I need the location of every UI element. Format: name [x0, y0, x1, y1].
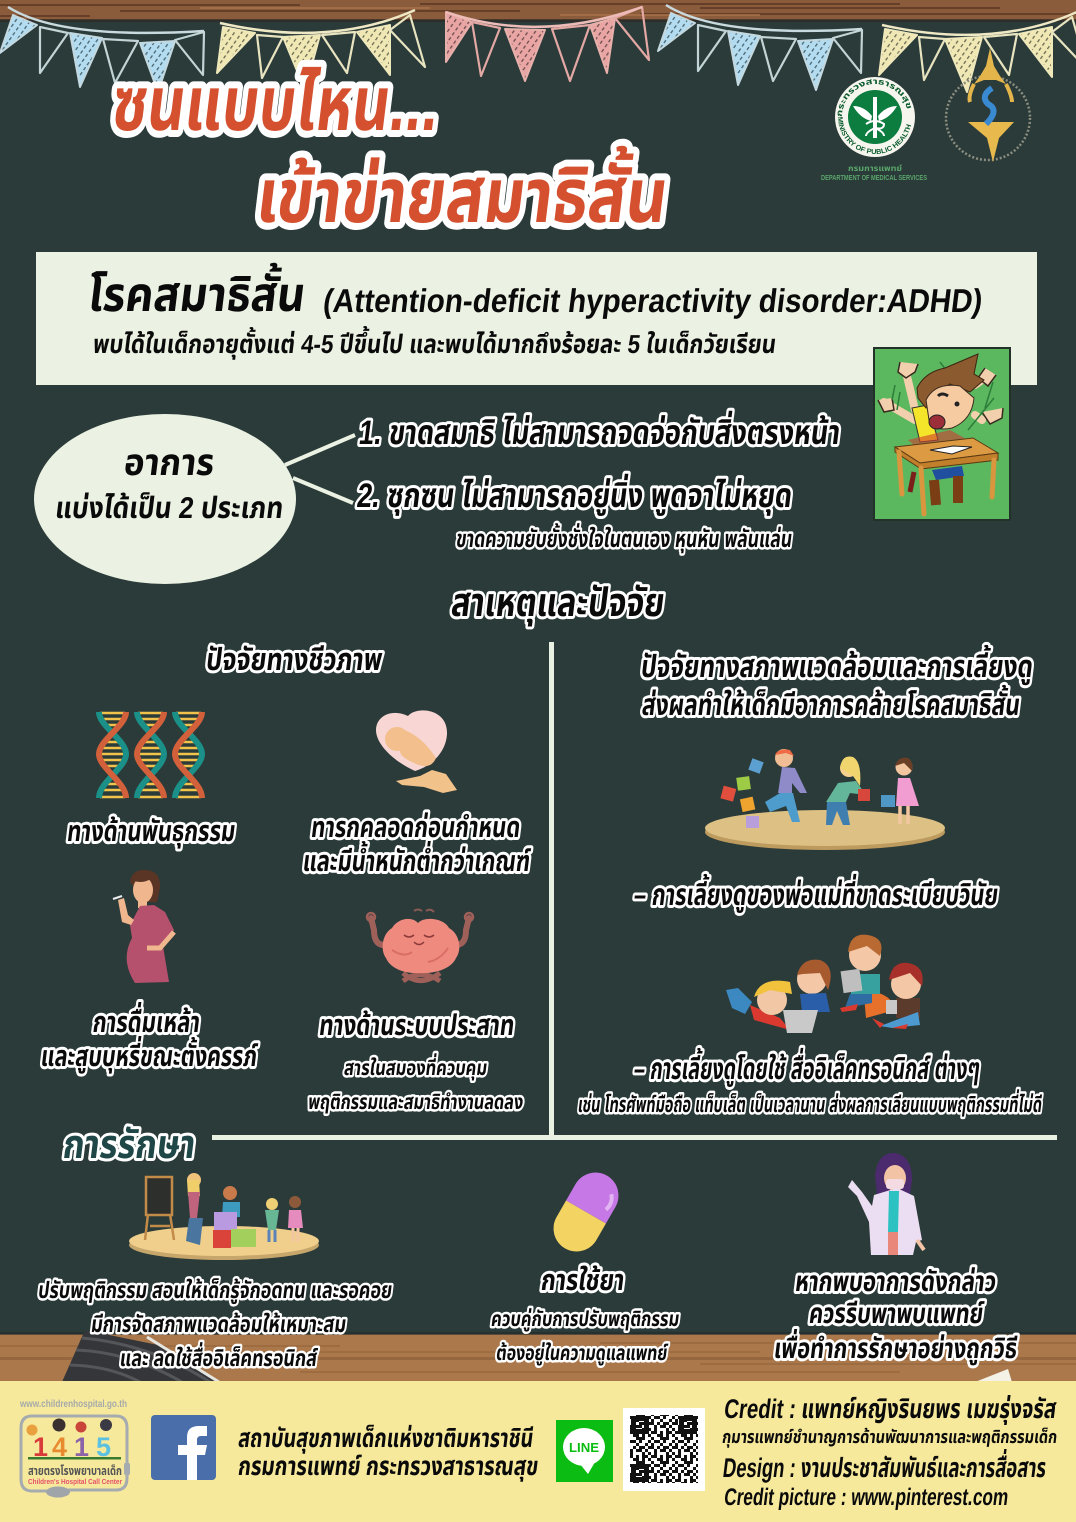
icon: line: LINE: [569, 1440, 599, 1455]
bunting flags: [0, 5, 1076, 92]
label: electronic media parenting: [577, 1047, 1044, 1117]
footer: 1415 call center logo: 1: [33, 1432, 48, 1462]
icon: pregnant woman smoking: [113, 870, 174, 983]
logo: ministry of public health: MINISTRY OF PUBLIC HEALTH: [838, 117, 912, 154]
label: nervous system: ทางด้านระบบประสาท: [317, 1010, 516, 1042]
label: behaviour therapy: และ ลดใช้สื่ออิเล็คทรอนิกส์: [119, 1342, 319, 1371]
footer: institute name: [236, 1423, 540, 1482]
logo: department emblem: [946, 48, 1030, 162]
label: premature birth: ทารกคลอดก่อนกำหนด: [309, 812, 522, 844]
icon: dna: [99, 712, 202, 798]
title: ซนแบบไหน...: [108, 62, 444, 147]
label: nervous system: [307, 1010, 525, 1114]
title: [108, 62, 674, 239]
icon: capsule: [545, 1164, 627, 1260]
symptom list: 2. ซุกซน ไม่สามารถอยู่นิ่ง พูดจาไม่หยุด: [355, 473, 795, 516]
label: see a doctor: [772, 1266, 1020, 1366]
icon: line: [556, 1420, 613, 1482]
footer: 1415 call center logo: 1: [74, 1432, 89, 1462]
icon: fetus in heart and hand: [376, 710, 457, 793]
footer: 1415 call center logo: สายตรงโรงพยาบาลเด็ก: [28, 1464, 122, 1478]
definition heading: โรคสมาธิสั้น: [85, 263, 309, 322]
icon: meditating brain: [367, 910, 473, 981]
footer: 1415 call center logo: 5: [96, 1432, 111, 1462]
divider horizontal: [212, 1135, 1057, 1140]
logo: ministry of public health: กรมการแพทย์: [848, 164, 902, 173]
label: nervous system: พฤติกรรมและสมาธิทำงานลดลง: [307, 1091, 525, 1114]
label: alcohol and smoking: การดื่มเหล้า: [91, 1001, 203, 1039]
divider vertical: [549, 642, 554, 1135]
label: behaviour therapy: มีการจัดสภาพแวดล้อมให้เหมาะสม: [90, 1311, 348, 1337]
symptom list: 1. ขาดสมาธิ ไม่สามารถจดจ่อกับสิ่งตรงหน้า: [357, 410, 843, 452]
connector lines: [285, 435, 355, 503]
footer: 1415 call center logo: 4: [52, 1432, 67, 1462]
label: genetics: ทางด้านพันธุกรรม: [65, 816, 237, 848]
footer: institute name: กรมการแพทย์ กระทรวงสาธารณสุข: [236, 1451, 540, 1482]
heading: biological factors: ปัจจัยทางชีวภาพ: [204, 642, 385, 677]
label: see a doctor: ควรรีบพาพบแพทย์: [807, 1298, 985, 1329]
oval subtext: แบ่งได้เป็น 2 ประเภท: [53, 492, 285, 525]
illustration: doctor: [848, 1153, 924, 1255]
oval: symptoms: [34, 414, 296, 584]
qr code: [623, 1408, 705, 1491]
label: medication: การใช้ยา: [539, 1265, 626, 1297]
title: เข้าข่ายสมาธิสั้น: [252, 145, 674, 239]
label: alcohol and smoking: [39, 1001, 260, 1074]
label: behaviour therapy: [37, 1277, 394, 1371]
definition description: พบได้ในเด็กอายุตั้งแต่ 4-5 ปีขึ้นไป และพบได้มากถึงร้อยละ 5 ในเด็กวัยเรียน: [91, 325, 779, 360]
footer: website: www.childrenhospital.go.th: [19, 1399, 127, 1410]
label: medication: ต้องอยู่ในความดูแลแพทย์: [495, 1342, 669, 1366]
label: medication: ควบคู่กับการปรับพฤติกรรม: [490, 1308, 681, 1332]
footer: 1415 call center logo: Children's Hospital Call Center: [28, 1479, 122, 1486]
symptom list: ขาดความยับยั้งชั่งใจในตนเอง หุนหัน พลันแล่น: [454, 523, 794, 554]
label: alcohol and smoking: และสูบบุหรี่ขณะตั้งครรภ์: [39, 1035, 260, 1074]
logo: ministry of public health: DEPARTMENT OF MEDICAL SERVICES: [821, 175, 927, 182]
symptom list: [355, 410, 843, 554]
wooden ledge bottom: [0, 1330, 1076, 1382]
label: behaviour therapy: ปรับพฤติกรรม สอนให้เด็กรู้จักอดทน และรอคอย: [37, 1277, 394, 1304]
icon: facebook: [151, 1415, 216, 1480]
footer: credits: [721, 1393, 1059, 1511]
logo: ministry of public health: กระทรวงสาธารณสุข: [838, 79, 912, 116]
footer: 1415 call center logo: [21, 1416, 130, 1498]
logo: ministry of public health: [821, 77, 927, 182]
label: premature birth: [301, 812, 533, 878]
heading: treatment: การรักษา: [61, 1122, 198, 1167]
illustration: children with devices: [726, 935, 923, 1033]
footer: institute name: สถาบันสุขภาพเด็กแห่งชาติมหาราชินี: [236, 1423, 535, 1454]
heading: environment factors: [639, 644, 1036, 722]
illustration: children playing with blocks: [705, 749, 945, 850]
panel: definition: [36, 252, 1037, 385]
illustration: behaviour therapy: [129, 1173, 319, 1260]
footer band: [0, 1381, 1076, 1522]
label: nervous system: สารในสมองที่ควบคุม: [343, 1053, 489, 1081]
heading: causes: สาเหตุและปัจจัย: [449, 580, 667, 627]
english name: (Attention-deficit hyperactivity disorder:ADHD): [321, 283, 985, 320]
label: premature birth: และมีน้ำหนักต่ำกว่าเกณฑ์: [301, 840, 533, 878]
oval heading: อาการ: [122, 441, 217, 483]
label: see a doctor: หากพบอาการดังกล่าว: [793, 1266, 998, 1297]
wooden frame top: [0, 0, 1076, 22]
label: medication: [490, 1265, 681, 1366]
illustration: hyperactive boy at desk: [874, 348, 1010, 520]
